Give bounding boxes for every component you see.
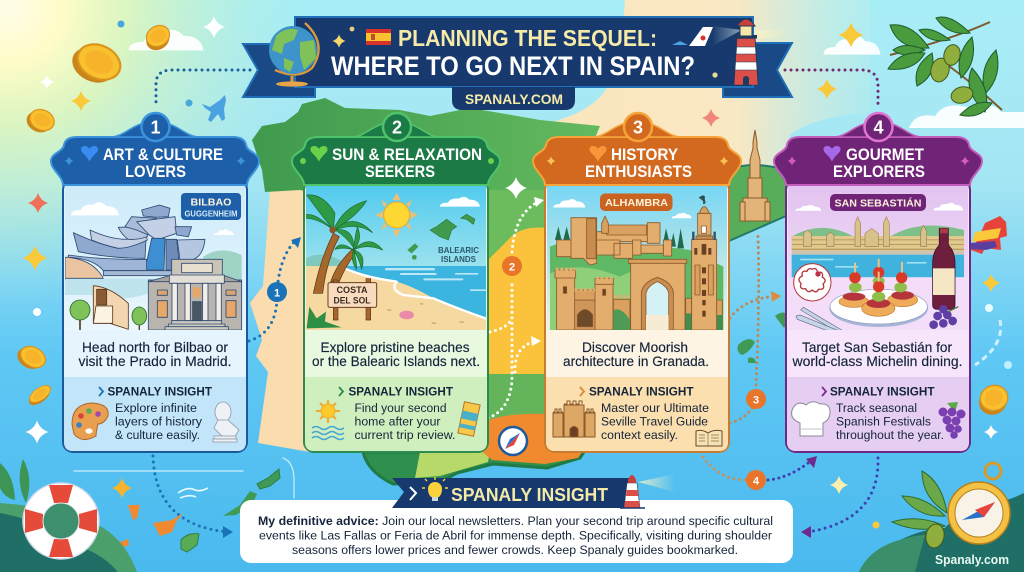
card 3 description: Discover Moorish (582, 340, 688, 355)
Seville tower landmark (740, 130, 770, 221)
card 2: sun and relaxation (292, 113, 500, 452)
globe icon (269, 23, 319, 87)
title banner (243, 17, 792, 110)
icon: open book (696, 430, 722, 446)
label: Balearic Islands: BALEARIC (438, 245, 479, 255)
card 4 illustration: San Sebastián pintxos (788, 186, 968, 330)
label: Balearic Islands (438, 245, 479, 264)
card 3 header: 3 (633, 118, 643, 138)
label: Costa del Sol (334, 285, 371, 306)
card 3 insight: SPANALY INSIGHT (589, 384, 694, 398)
domain tab: SPANALY.COM (465, 91, 563, 107)
number markers on route: 3 (753, 394, 759, 406)
card 1 header: ART & CULTURE (103, 146, 223, 164)
card 2 insight (312, 384, 480, 442)
badge: Alhambra (600, 194, 672, 211)
icon: beach towel (458, 402, 480, 436)
card 2 insight: Find your second (354, 401, 447, 415)
compass on map (499, 427, 527, 455)
lighthouse (734, 19, 790, 85)
advice text: seasons offers lower prices and fewer crowds. Keep Spanaly guides bookmarked. (292, 543, 738, 557)
canary islands (112, 469, 280, 552)
badge: Alhambra: ALHAMBRA (605, 197, 668, 209)
lighthouse beam (712, 26, 742, 46)
card 2 header (292, 113, 500, 185)
card 3 insight panel (546, 377, 728, 451)
card 1 insight (72, 384, 239, 442)
card 2 header: 2 (392, 118, 402, 138)
card 1: art and culture (51, 113, 259, 452)
title line one: PLANNING THE SEQUEL: (398, 25, 657, 51)
card 2 header: SEEKERS (365, 163, 435, 181)
card 2 insight panel (305, 377, 487, 451)
card 1 header: LOVERS (125, 163, 186, 181)
card 1 insight: & culture easily. (115, 428, 200, 442)
number markers on route (267, 256, 766, 490)
advice panel (240, 474, 793, 563)
card 3 description (563, 340, 709, 369)
card 4 header: 4 (873, 118, 884, 138)
number markers on route: 2 (509, 262, 515, 274)
card 1 body (63, 180, 247, 452)
card 3 insight: context easily. (601, 428, 678, 442)
dotted route paths (74, 70, 1001, 532)
flag of Spain (366, 29, 391, 45)
advice text: events like Las Fallas or Feria de Abril for immense depth. Specifically, visiting during shoulder (259, 528, 772, 542)
label: Costa del Sol: DEL SOL (334, 296, 371, 306)
icon: small lighthouse (620, 474, 675, 508)
card 4: gourmet (774, 113, 982, 452)
card 4 insight panel (787, 377, 969, 451)
card 2 header: SUN & RELAXATION (332, 146, 482, 164)
card 4 description (791, 340, 962, 369)
badge: Bilbao Guggenheim: GUGGENHEIM (184, 210, 238, 218)
card 1 insight: SPANALY INSIGHT (108, 384, 213, 398)
badge: San Sebastián: SAN SEBASTIÁN (834, 196, 922, 210)
card 3 header: ENTHUSIASTS (585, 163, 692, 181)
card 4 body (786, 180, 970, 452)
badge: Bilbao Guggenheim (181, 193, 241, 220)
domain tab (452, 87, 575, 110)
card 1 insight panel (64, 377, 246, 451)
olive branch (888, 17, 1002, 116)
badge: Bilbao Guggenheim: BILBAO (190, 196, 232, 208)
card 2 insight: home after your (354, 414, 440, 428)
icon: paint palette (72, 403, 108, 440)
card 2 insight: SPANALY INSIGHT (348, 384, 454, 398)
label: Costa del Sol: COSTA (336, 285, 368, 296)
main ribbon (295, 17, 753, 87)
number markers on route: 4 (753, 476, 760, 488)
card 1 illustration: Guggenheim and Prado (65, 186, 245, 330)
card 2 illustration: beach (300, 186, 490, 333)
ribbon tails (243, 43, 792, 97)
card 4 description: world-class Michelin dining. (791, 354, 962, 369)
icon: grapes (938, 402, 966, 439)
icon: marble bust (213, 402, 239, 442)
card 4 insight: Spanish Festivals (836, 414, 931, 428)
card 1 description: Head north for Bilbao or (82, 340, 228, 355)
card 4 insight: throughout the year. (836, 428, 944, 442)
card 3 insight (553, 384, 722, 446)
card 4 insight (792, 384, 966, 442)
footer domain: Spanaly.com (935, 553, 1009, 567)
card 2 description: Explore pristine beaches (320, 340, 470, 355)
card 4 description: Target San Sebastián for (802, 340, 952, 355)
card 4 header: EXPLORERS (833, 163, 925, 181)
card 3 insight: Master our Ultimate (601, 401, 709, 415)
card 1 description: visit the Prado in Madrid. (78, 354, 232, 369)
card 1 insight: Explore infinite (115, 401, 197, 415)
card 3 body (545, 180, 729, 452)
badge: San Sebastián (830, 194, 926, 211)
card 2 description (312, 340, 480, 369)
icon: light bulb (422, 477, 448, 501)
map of Spain (250, 0, 870, 484)
card 4 header: GOURMET (846, 146, 924, 164)
card 2 insight: current trip review. (354, 428, 456, 442)
life ring corner (0, 459, 137, 572)
number markers on route: 1 (274, 288, 280, 300)
sparkle and dots in banner (332, 27, 718, 78)
card 1 description (78, 340, 232, 369)
card 3 header: HISTORY (611, 146, 678, 164)
route arrowheads (223, 197, 817, 538)
card 3 illustration: Alhambra (547, 186, 727, 330)
advice text (258, 514, 773, 557)
card 3 insight: Seville Travel Guide (601, 414, 708, 428)
title line two: WHERE TO GO NEXT IN SPAIN? (331, 51, 695, 81)
card 1 header (51, 113, 259, 185)
insight banner (392, 474, 675, 508)
card 3: history (533, 113, 741, 452)
card 4 insight: Track seasonal (836, 401, 917, 415)
label: Balearic Islands: ISLANDS (441, 254, 476, 264)
card 2 description: or the Balearic Islands next. (312, 354, 480, 369)
card 1 insight: layers of history (115, 414, 203, 428)
card 4 insight: SPANALY INSIGHT (830, 384, 935, 398)
card 2 body (304, 180, 488, 452)
icon: sun and waves (312, 400, 344, 440)
card 3 description: architecture in Granada. (563, 354, 709, 369)
plane tail (672, 27, 713, 46)
card 1 header: 1 (150, 118, 161, 138)
card 4 header (774, 113, 982, 185)
advice text: My definitive advice: Join our local newsletters. Plan your second trip around specific cultural (258, 514, 773, 528)
compass corner (859, 463, 1024, 572)
advice panel background (240, 500, 793, 563)
card 3 header (533, 113, 741, 185)
insight banner: SPANALY INSIGHT (451, 485, 608, 505)
icon: chef hat (792, 402, 830, 436)
icon: castle (553, 401, 595, 437)
clouds (128, 30, 1024, 128)
